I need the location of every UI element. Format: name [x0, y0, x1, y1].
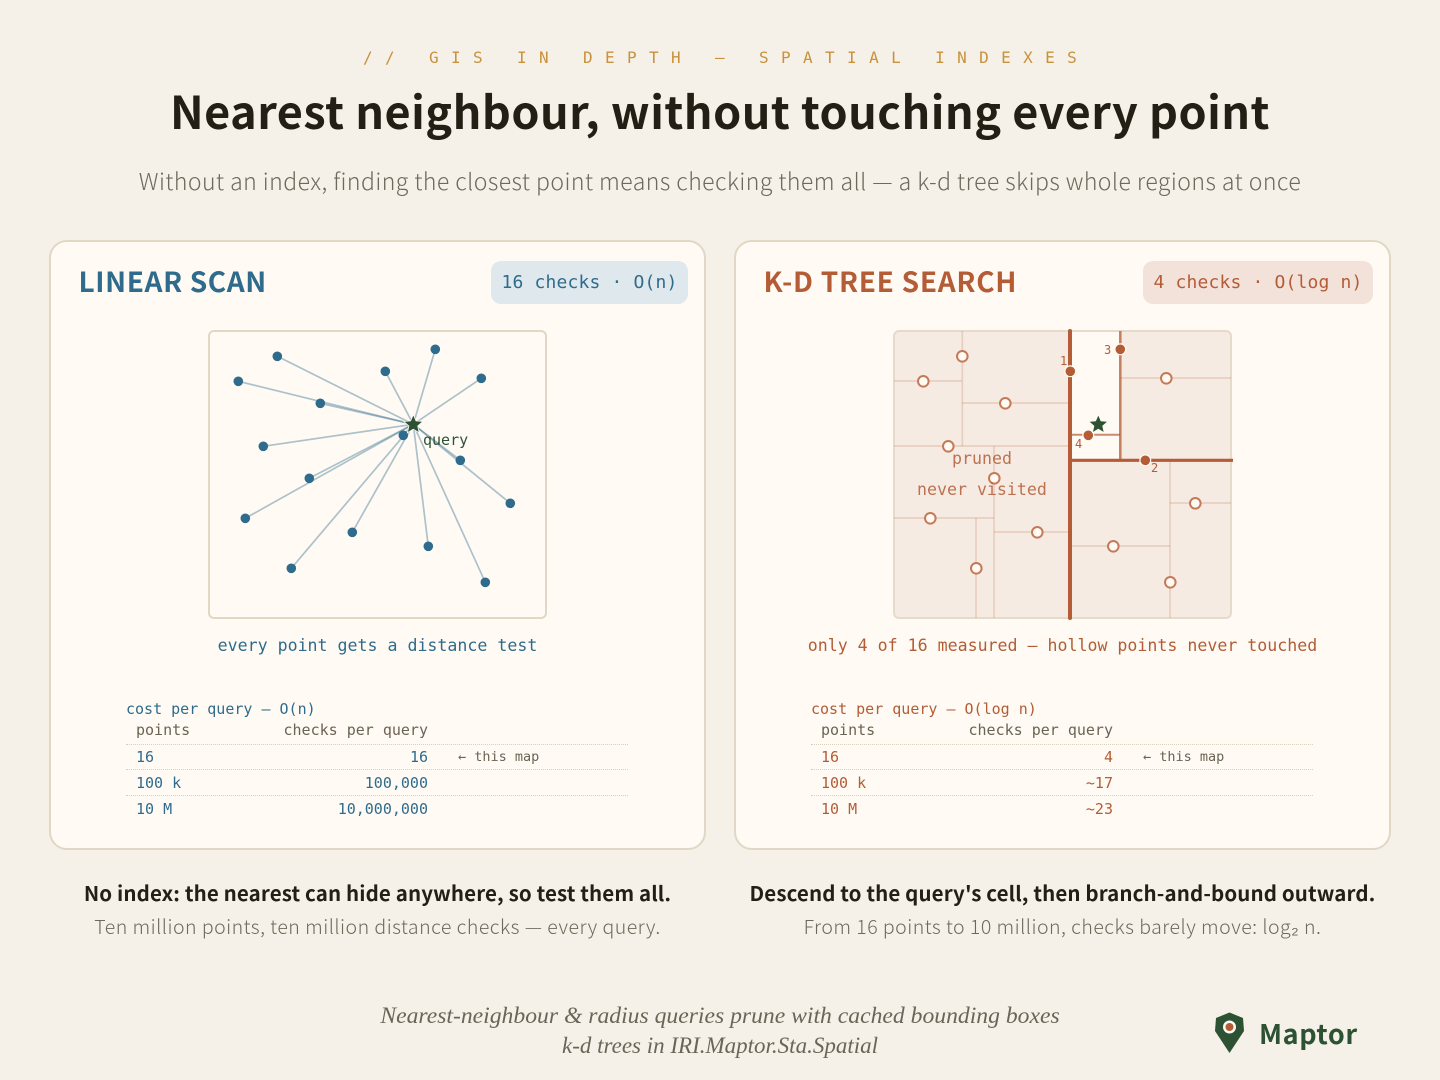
takeaway: linear scan: No index: the nearest can hide anywhere, so test them all.: [84, 877, 671, 907]
footer note: Nearest-neighbour & radius queries prune with cached bounding boxes: [380, 1003, 1060, 1029]
note: linear scan: Ten million points, ten million distance checks — every query.: [94, 911, 661, 940]
chart: k-d tree map: 2: [1151, 461, 1158, 475]
heading: k-d tree search: K-D TREE SEARCH: [764, 261, 1017, 301]
chart: linear scan map: [208, 330, 547, 619]
chart: k-d tree map: 1: [1060, 354, 1067, 368]
table: linear scan cost: 10 M: [136, 800, 172, 818]
table: k-d tree cost: ~23: [1086, 800, 1113, 818]
table: k-d tree cost: ~17: [1086, 774, 1113, 792]
panel: k-d tree search: [734, 240, 1391, 850]
table: linear scan cost: 100,000: [365, 774, 428, 792]
chart: k-d tree map: pruned: [952, 449, 1012, 468]
takeaway: k-d tree: Descend to the query's cell, then branch-and-bound outward.: [750, 877, 1375, 907]
chart: linear scan map: query: [423, 431, 468, 449]
note: k-d tree: From 16 points to 10 million, checks barely move: log₂ n.: [804, 911, 1321, 940]
footer note: k-d trees in IRI.Maptor.Sta.Spatial: [562, 1033, 878, 1058]
table: linear scan cost: [126, 700, 628, 818]
table: k-d tree cost: checks per query: [968, 721, 1113, 739]
chart: k-d tree map: 3: [1104, 343, 1111, 357]
badge: k-d tree search: [1143, 261, 1373, 304]
table: linear scan cost: 10,000,000: [338, 800, 428, 818]
table: linear scan cost: points: [136, 721, 190, 739]
table: linear scan cost: ← this map: [458, 749, 539, 765]
icon: Maptor pin: [1215, 1012, 1244, 1053]
table: k-d tree cost: points: [821, 721, 875, 739]
badge: linear scan: 16 checks · O(n): [502, 272, 677, 293]
table: k-d tree cost: cost per query — O(log n): [811, 700, 1037, 718]
table: k-d tree cost: ← this map: [1143, 749, 1224, 765]
chart: k-d tree map: 4: [1075, 437, 1082, 451]
caption: k-d tree: only 4 of 16 measured — hollow points never touched: [808, 636, 1317, 655]
panel: linear scan: [49, 240, 706, 850]
table: k-d tree cost: 4: [1104, 748, 1113, 766]
title: Nearest neighbour, without touching every point: [170, 77, 1270, 142]
chart: k-d tree map: [893, 329, 1233, 620]
badge: k-d tree search: 4 checks · O(log n): [1154, 272, 1362, 293]
table: k-d tree cost: [811, 700, 1313, 818]
subtitle: Without an index, finding the closest point means checking them all — a k-d tree skips whole regions at once: [139, 163, 1301, 197]
badge: linear scan: [491, 261, 688, 304]
footer note: [380, 1003, 1060, 1058]
caption: linear scan: every point gets a distance test: [218, 636, 537, 655]
table: linear scan cost: cost per query — O(n): [126, 700, 316, 718]
table: k-d tree cost: 16: [821, 748, 839, 766]
table: linear scan cost: 16: [410, 748, 428, 766]
heading: linear scan: LINEAR SCAN: [78, 261, 267, 301]
table: linear scan cost: checks per query: [284, 721, 428, 739]
table: k-d tree cost: 10 M: [821, 800, 857, 818]
table: linear scan cost: 16: [136, 748, 154, 766]
table: k-d tree cost: 100 k: [821, 774, 866, 792]
brand name: Maptor: [1259, 1013, 1358, 1052]
eyebrow: // GIS IN DEPTH — SPATIAL INDEXES: [363, 48, 1089, 67]
table: linear scan cost: 100 k: [136, 774, 181, 792]
chart: k-d tree map: never visited: [917, 480, 1047, 499]
